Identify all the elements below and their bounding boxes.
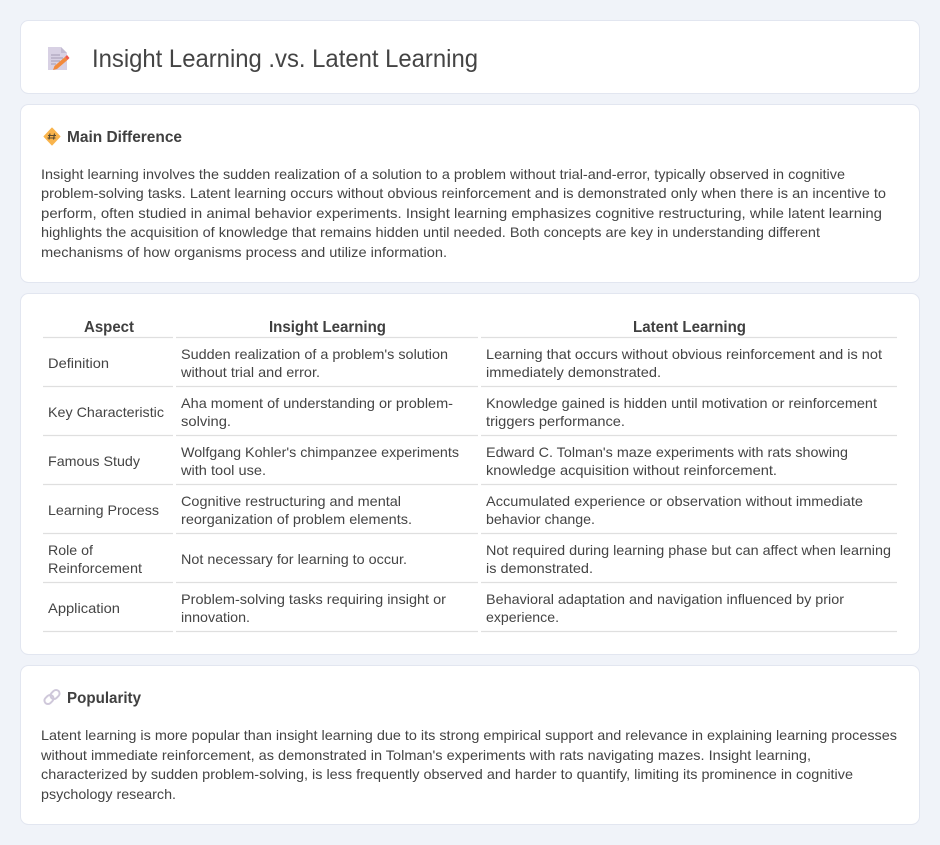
- row: famous study: Edward C. Tolman's maze experiments with rats showing: [486, 444, 848, 460]
- text block: popularity: without immediate reinforcement, as demonstrated in Tolman's experiments with rats navigating mazes. Insight learning,: [40, 747, 811, 763]
- panel: header: [20, 20, 920, 94]
- row: famous study: Famous Study: [48, 453, 140, 469]
- text block: main difference: problem-solving tasks. Latent learning occurs without obvious reinforcement and is demonstrated only when there is an incentive to: [41, 185, 886, 201]
- text block: main difference: highlights the acquisition of knowledge that remains hidden until needed. Both concepts are key in understanding different: [41, 224, 820, 240]
- row: definition: [48, 346, 882, 380]
- row: application: Application: [48, 600, 120, 616]
- panel: comparison table: [20, 294, 920, 654]
- row: role of reinforcement: Reinforcement: [48, 560, 142, 576]
- table header: Latent Learning: [633, 319, 746, 336]
- table header: Aspect: [84, 319, 135, 336]
- row: learning process: Accumulated experience or observation without immediate: [486, 493, 863, 509]
- icon: chain link: [43, 688, 61, 706]
- table header: Insight Learning: [269, 319, 386, 336]
- heading: main difference: Main Difference: [67, 129, 182, 146]
- panel: popularity: [20, 666, 920, 824]
- panel: main difference: [20, 104, 920, 282]
- row: learning process: [48, 493, 863, 527]
- row: key characteristic: Aha moment of understanding or problem-: [181, 395, 453, 411]
- row: role of reinforcement: is demonstrated.: [486, 560, 593, 576]
- text block: popularity: Latent learning is more popular than insight learning due to its strong empirical support and relevance in explaining learning processes: [41, 727, 897, 743]
- row: role of reinforcement: Not necessary for learning to occur.: [181, 551, 407, 567]
- row: definition: Learning that occurs without obvious reinforcement and is not: [486, 346, 882, 362]
- table header: [84, 319, 746, 336]
- row: application: Problem-solving tasks requiring insight or: [181, 591, 446, 607]
- row: learning process: Cognitive restructuring and mental: [181, 493, 401, 509]
- text block: popularity: characterized by sudden problem-solving, is less frequently observed and harder to quantify, limiting its prominence in cognitive: [41, 766, 853, 782]
- text block: main difference: mechanisms of how organisms process and utilize information.: [41, 244, 447, 260]
- row: definition: Definition: [48, 355, 109, 371]
- row: key characteristic: solving.: [181, 413, 231, 429]
- row: key characteristic: Key Characteristic: [48, 404, 164, 420]
- row: famous study: [48, 444, 848, 478]
- row: key characteristic: triggers performance.: [486, 413, 625, 429]
- row: definition: Sudden realization of a problem's solution: [181, 346, 448, 362]
- row: famous study: knowledge acquisition without reinforcement.: [486, 462, 777, 478]
- text block: popularity: [40, 727, 897, 802]
- row: application: [48, 591, 844, 625]
- row: application: Behavioral adaptation and navigation influenced by prior: [486, 591, 844, 607]
- row: definition: without trial and error.: [180, 364, 320, 380]
- row: application: experience.: [486, 609, 559, 625]
- row: learning process: Learning Process: [48, 502, 159, 518]
- icon: warning diamond: [44, 128, 60, 145]
- row: famous study: with tool use.: [180, 462, 266, 478]
- text block: main difference: perform, often studied in animal behavior experiments. Insight learning emphasizes cognitive restructuring, while latent learning: [41, 205, 882, 221]
- row: key characteristic: [48, 395, 877, 429]
- row: famous study: Wolfgang Kohler's chimpanzee experiments: [181, 444, 459, 460]
- row: learning process: behavior change.: [486, 511, 595, 527]
- row: role of reinforcement: Not required during learning phase but can affect when learning: [486, 542, 891, 558]
- row: definition: immediately demonstrated.: [486, 364, 661, 380]
- text block: popularity: psychology research.: [41, 786, 176, 802]
- text block: main difference: Insight learning involves the sudden realization of a solution to a problem without trial-and-error, typically observed in cognitive: [41, 166, 845, 182]
- row: role of reinforcement: Role of: [48, 542, 93, 558]
- text block: main difference: [41, 166, 886, 260]
- icon: document with pencil: [48, 47, 70, 70]
- row: key characteristic: Knowledge gained is hidden until motivation or reinforcement: [486, 395, 877, 411]
- heading: popularity: Popularity: [67, 690, 141, 707]
- row: application: innovation.: [181, 609, 250, 625]
- title: Insight Learning .vs. Latent Learning: [92, 45, 478, 73]
- row: role of reinforcement: [48, 542, 891, 576]
- row: learning process: reorganization of problem elements.: [181, 511, 412, 527]
